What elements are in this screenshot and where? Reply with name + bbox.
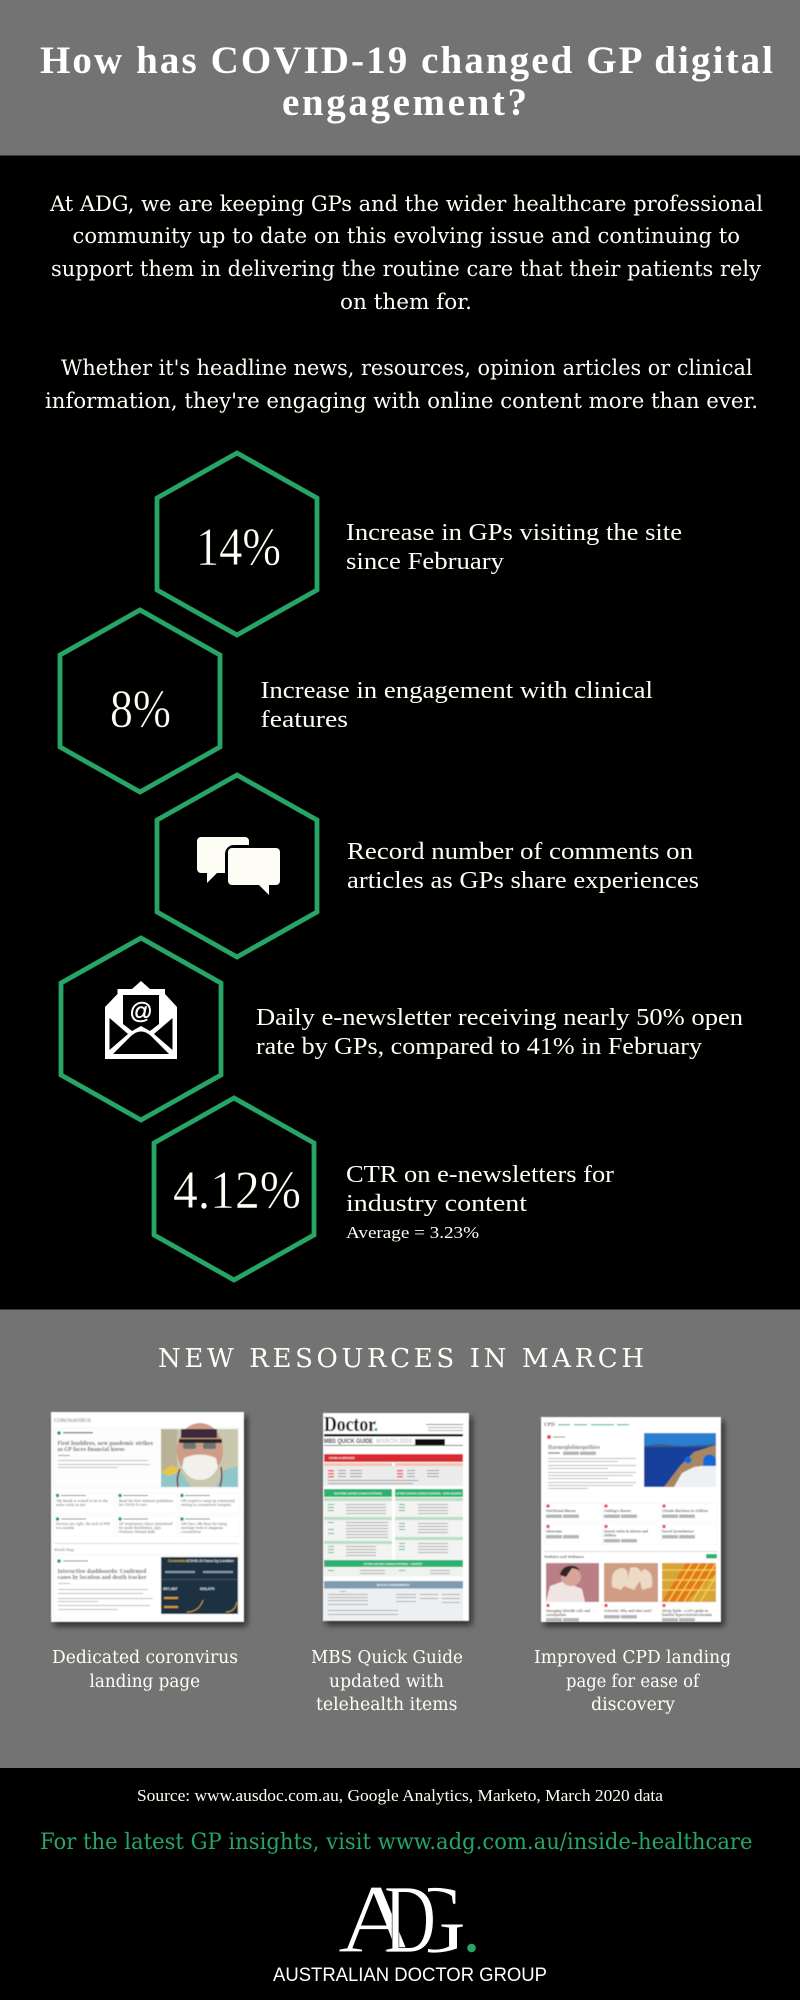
thumbnail: coronavirus landing page: 693,470 [200,1586,215,1591]
stat text: comments: articles as GPs share experiences [347,868,699,894]
thumbnail: coronavirus landing page: 'My family is scared to be in the [56,1499,108,1503]
thumbnail: coronavirus landing page: GPs urged to ramp up community [181,1499,235,1503]
thumbnail: coronavirus landing page: COVID-19 Cases by Location [187,1559,234,1563]
stat text: CTR: CTR on e-newsletters for [346,1162,614,1188]
thumbnail: coronavirus landing page: for COVID-19 care [119,1503,147,1507]
title text: engagement? [282,81,527,124]
icon: speech bubbles [197,837,280,895]
stat: 14% hexagon [157,453,317,635]
ADG logo: D [384,1866,436,1974]
thumbnail: coronavirus landing page: 957,487 [163,1586,178,1591]
stat text: clinical engagement: features [260,707,348,733]
stat: newsletter hexagon with envelope icon [61,938,221,1120]
thumbnail: MBS quick guide: COVID-19 SERVICES [329,1456,355,1460]
thumbnail: coronavirus landing page: Read the first national guidelines [119,1499,173,1503]
resources heading: NEW RESOURCES IN MARCH [158,1344,644,1374]
ADG logo: AUSTRALIAN DOCTOR GROUP [273,1964,547,1986]
thumbnail: CPD landing page: Modules and Webinars [544,1554,585,1559]
thumbnail: coronavirus landing page: testing in coronavirus hotspots [181,1503,231,1507]
intro paragraph: community up to date on this evolving issue and continuing to [72,224,740,249]
caption: MBS guide: updated with [329,1672,444,1692]
panel: new resources [0,1310,800,1768]
stat: 4.12% hexagon [154,1098,314,1280]
thumbnail: CPD landing page: Sticky lipids - a GP's guide to [662,1609,709,1613]
intro paragraph: on them for. [340,290,472,315]
stat text: clinical engagement: Increase in engagement with clinical [260,678,653,704]
title banner [0,0,800,156]
stat text: visits [346,520,682,575]
thumbnail: coronavirus landing page: cases by location and death tracker [58,1575,147,1581]
call to action: For the latest GP insights, visit www.adg.com.au/inside-healthcare [40,1830,752,1855]
thumbnail: CPD landing page: Cushing's disease [604,1509,632,1513]
thumbnail: coronavirus landing page: Coronavirus [168,1559,188,1563]
stat: 14% hexagon: 14% [196,517,281,577]
thumbnail: MBS quick guide: AFTER HOURS CONSULTATIONS - URGENT [364,1562,423,1566]
title text: How has COVID-19 changed GP digital [40,39,773,82]
thumbnail: coronavirus landing page: GPs face 24h fines for using [181,1522,228,1526]
intro paragraph: information, they're engaging with online content more than ever. [45,389,758,414]
caption: MBS guide: telehealth items [316,1695,458,1715]
thumbnail: coronavirus landing page: same room as me' [56,1503,86,1507]
thumbnail: MBS quick guide [323,1412,472,1625]
stat text: CTR: industry content [346,1191,527,1217]
thumbnail: CPD landing page: Managing infantile colic and [546,1609,590,1613]
thumbnail: coronavirus landing page: Professor Michael Kidd [119,1530,156,1534]
source line: Source: www.ausdoc.com.au, Google Analytics, Marketo, March 2020 data [137,1786,663,1805]
intro paragraph: Whether it's headline news, resources, opinion articles or clinical [61,356,753,381]
thumbnail: coronavirus landing page: GP respiratory clinics 'prioritised' [119,1522,173,1526]
thumbnail: coronavirus landing page: First bushfires, new pandemic strikes [58,1441,153,1447]
thumbnail: CPD landing page: CPD [544,1422,556,1428]
stat text: newsletter: Daily e-newsletter receiving nearly 50% open [256,1005,743,1031]
intro paragraph: At ADG, we are keeping GPs and the wider healthcare professional [49,192,763,217]
stat text: visits: since February [346,549,504,575]
thumbnail: coronavirus landing page: CORONAVIRUS [54,1418,92,1424]
stat: 8% hexagon [60,610,220,792]
thumbnail: MBS quick guide: MBS QUICK GUIDE [324,1439,373,1445]
caption: MBS guide [311,1648,463,1715]
thumbnail: coronavirus landing page: coronavirus [181,1530,201,1534]
stat text: comments: Record number of comments on [347,839,693,865]
thumbnail: CPD landing page: Dental caries in infants and [604,1530,648,1534]
caption: CPD page: Improved CPD landing [534,1648,731,1668]
icon: open envelope [105,981,177,1059]
caption: MBS guide: MBS Quick Guide [311,1648,463,1668]
thumbnail: CPD landing page: constipation [546,1613,566,1617]
thumbnail: coronavirus landing page [51,1412,247,1626]
thumbnail: coronavirus landing page: is a scandal [56,1526,74,1530]
stat: comments hexagon with chat icon [157,775,317,957]
ADG logo: G [400,1866,466,1974]
thumbnail: coronavirus landing page: World Map [54,1547,74,1552]
thumbnail: MBS quick guide: AFTER HOURS CONSULTATIONS - NON URGENT [396,1492,462,1496]
ADG logo: A [338,1866,416,1974]
thumbnail: coronavirus landing page: Doctors are right, the lack of PPE [56,1522,111,1526]
ADG logo [273,1888,546,1981]
thumbnail: CPD landing page: Glaucoma [546,1530,563,1534]
stat text: comments [347,839,699,894]
thumbnail: CPD landing page: children [604,1534,616,1538]
intro paragraph: support them in delivering the routine care that their patients rely [51,257,762,282]
stat text: newsletter [256,1005,743,1060]
thumbnail: CPD landing page: Nutritional disease [546,1509,577,1513]
thumbnail: CPD landing page: Urticaria: Why and what next? [604,1609,652,1613]
thumbnail: CPD landing page [541,1417,724,1626]
stat text: visits: Increase in GPs visiting the site [346,520,682,546]
stat text: CTR: Average = 3.23% [346,1223,479,1242]
thumbnail: CPD landing page: familial hypercholesterolaemia [662,1613,713,1617]
thumbnail: MBS quick guide: ROUTINE HOURS CONSULTATIONS [334,1492,382,1496]
title text [40,39,773,124]
thumbnail: CPD landing page: Haemoglobinopathies [548,1445,601,1451]
intro paragraph [45,192,763,414]
stat: 4.12% hexagon: 4.12% [173,1160,301,1220]
stat text: CTR [346,1162,614,1242]
thumbnail: coronavirus landing page: Interactive dashboards: Confirmed [58,1569,147,1575]
stat text: newsletter: rate by GPs, compared to 41% in February [256,1034,702,1060]
caption: CPD page: discovery [591,1695,675,1715]
stat: 8% hexagon: 8% [110,679,171,739]
thumbnail: coronavirus landing page: serology tests to diagnose [181,1526,223,1530]
caption: CPD page [534,1648,731,1715]
thumbnail: MBS quick guide: Doctor [324,1412,376,1436]
thumbnail: CPD landing page: Chronic diarrhoea in children [662,1509,708,1513]
caption: coronavirus page [52,1648,238,1692]
stat text: clinical engagement [260,678,653,733]
thumbnail: CPD landing page: Faecal incontinence [662,1530,695,1534]
thumbnail: coronavirus landing page: as GP faces financial havoc [58,1447,125,1453]
thumbnail: MBS quick guide: HEALTH ASSESSMENTS [377,1583,410,1587]
thumbnail: coronavirus landing page: for mask distribution, says [119,1526,161,1530]
caption: coronavirus page: Dedicated coronvirus [52,1648,238,1668]
caption: CPD page: page for ease of [566,1672,700,1692]
icon: open envelope: @ [129,998,153,1024]
caption: coronavirus page: landing page [90,1672,200,1692]
thumbnail: MBS quick guide: MARCH 2020 [376,1439,413,1445]
